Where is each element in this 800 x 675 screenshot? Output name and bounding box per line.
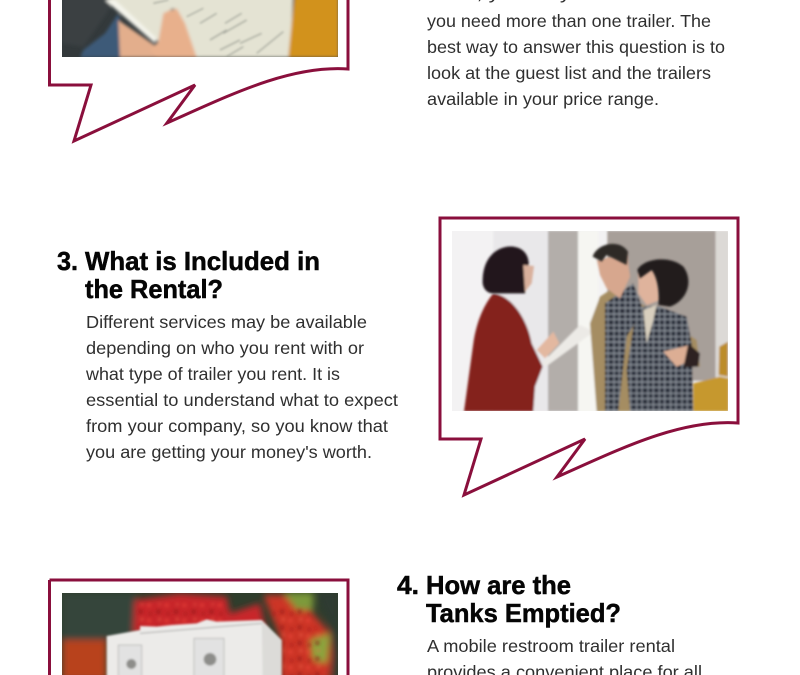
panel: section 4 photo speech bubble xyxy=(50,580,348,675)
heading: section 3 xyxy=(57,246,320,304)
text block: section 3 body: what type of trailer you rent. It is xyxy=(85,364,340,384)
text block: section 2 body: look at the guest list and the trailers xyxy=(427,63,711,83)
photo: white restroom trailer before red foliage xyxy=(62,593,339,675)
text block: section 2 body: available in your price range. xyxy=(427,89,659,109)
bubble outline xyxy=(440,218,738,495)
heading: section 4: 4. xyxy=(397,570,419,600)
text block: section 3 body: you are getting your money's worth. xyxy=(86,442,372,462)
heading: section 4 xyxy=(397,570,621,628)
panel: section 2 photo speech bubble xyxy=(50,0,348,141)
text block: section 2 body xyxy=(427,0,725,109)
text block: section 4 body: A mobile restroom trailer rental xyxy=(427,636,675,656)
text block: section 3 body xyxy=(85,312,398,462)
text block: section 3 body: from your company, so you know that xyxy=(86,416,388,436)
heading: section 4: Tanks Emptied? xyxy=(426,598,621,628)
text block: section 3 body: Different services may be available xyxy=(86,312,367,332)
text block: section 4 body xyxy=(427,636,702,675)
text block: section 2 body: best way to answer this question is to xyxy=(427,37,725,57)
photo: agent with clipboard talking to a couple xyxy=(452,231,729,411)
text block: section 2 body: you need more than one trailer. The xyxy=(427,11,711,31)
panel: section 3 photo speech bubble xyxy=(440,218,738,495)
photo: hands holding a notebook xyxy=(62,0,339,57)
heading: section 3: the Rental? xyxy=(85,274,223,304)
bubble outline xyxy=(50,0,348,141)
heading: section 4: How are the xyxy=(426,570,571,600)
text block: section 3 body: depending on who you rent with or xyxy=(86,338,364,358)
text block: section 3 body: essential to understand what to expect xyxy=(86,390,398,410)
heading: section 3: What is Included in xyxy=(85,246,320,276)
bubble outline xyxy=(50,580,348,675)
heading: section 3: 3. xyxy=(57,246,78,276)
